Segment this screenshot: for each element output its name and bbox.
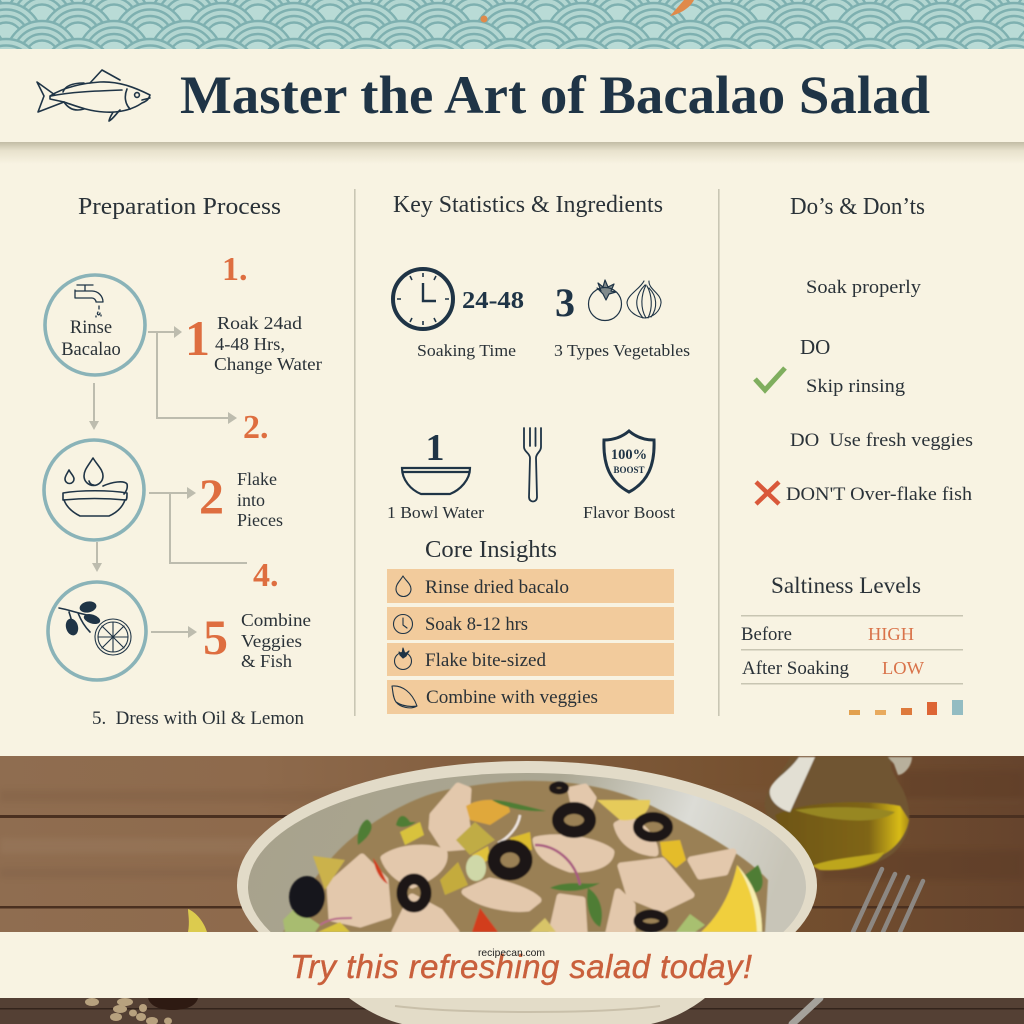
do list: Skip rinsing [806,376,906,397]
step 1 circle: rinse bacalao: Rinse [70,318,112,338]
handwritten call to action: Try this refreshing salad today! [290,948,752,985]
stat: vegetables [554,280,690,360]
flow arrows [89,326,247,638]
do list: DO [800,335,830,359]
step 1 circle: rinse bacalao: Bacalao [61,340,121,360]
saltiness levels table: Before [741,624,792,645]
salad bowl [237,761,817,1024]
icon: fork [524,428,541,502]
stat: soaking time: Soaking Time [417,341,516,360]
step 2 text: into [237,490,265,510]
stat: flavor boost: 100% [611,447,647,463]
final step text: 5. Dress with Oil & Lemon [92,709,304,729]
step 1 markers: 1 [185,310,210,366]
insight row: combine [387,680,674,714]
yellow peppers [313,800,686,932]
step 1 text [214,313,322,374]
icon: onion [627,281,661,318]
do list [755,277,973,451]
saltiness levels table: After Soaking [742,658,849,679]
salad pile [283,781,768,932]
insight row: rinse [387,569,674,603]
oil jug [765,757,912,870]
olive rings [402,784,668,928]
step 2 circle: bowl and drops [44,440,144,540]
heading: do's and don'ts: Do’s & Don’ts [790,194,925,220]
back lemon [597,800,650,820]
icon: shield [604,431,654,492]
panel: do's and don'ts [741,194,973,715]
stat: flavor boost: BOOST [613,465,645,475]
step 2 markers: 2. [243,409,268,446]
saltiness levels table: HIGH [868,624,914,644]
stat: flavor boost [583,431,675,522]
insight row: flake: Flake bite-sized [425,650,546,671]
stat: flavor boost: Flavor Boost [583,503,675,522]
insight row: combine: Combine with veggies [426,687,598,708]
icon: tap [75,285,103,317]
do list: Soak properly [806,277,922,298]
source credit: recipecan.com [478,947,545,959]
step 5 text: & Fish [241,651,292,671]
wooden table [0,756,1024,1024]
stat: bowl of water: 1 [426,427,444,469]
step 2 text: Pieces [237,510,283,530]
insight row: soak [387,607,674,640]
icon: lemon slice [95,619,131,655]
whole olive [289,876,325,918]
lemon wedge [701,865,762,932]
icon: clock [393,269,453,329]
saltiness levels table [741,573,963,715]
step 3 circle: olives and lemon [48,582,146,680]
stat: bowl of water [387,427,484,522]
icon: tomato [588,280,622,320]
call-to-action band [0,932,1024,998]
stat: soaking time: 24-48 [462,287,524,314]
wave pattern banner [0,0,1024,49]
header band [0,49,1024,164]
step 1 text: Change Water [214,354,322,374]
title: Master the Art of Bacalao Salad [180,65,930,125]
stat: vegetables: 3 [555,280,575,325]
saltiness levels table: Saltiness Levels [771,573,921,598]
column dividers [354,189,720,716]
don't item: DON'T Over-flake fish [786,484,973,505]
do list: DO Use fresh veggies [790,430,973,451]
step 2 text: Flake [237,469,277,489]
stat: bowl of water: 1 Bowl Water [387,503,484,522]
step 2 markers [199,409,268,524]
icon: water drops over bowl [63,458,127,516]
step 1 text: 4-48 Hrs, [215,334,285,354]
heading: preparation process: Preparation Process [78,194,281,220]
step 5 text [241,610,311,671]
seeds and dark bowl [85,998,198,1024]
step 4 marker: 4. [253,557,278,594]
insight row: flake [387,643,674,676]
fork [792,869,923,1024]
panel: key statistics and ingredients [387,192,690,714]
step 2 markers: 2 [199,468,224,524]
step 2 text [237,469,283,530]
insight row: rinse: Rinse dried bacalo [425,577,569,598]
greens [283,800,763,932]
step 1 text: Roak 24ad [217,313,302,333]
step 5 text: Veggies [241,631,302,651]
panel: preparation process [44,194,322,729]
saltiness bars [849,700,963,715]
lemon scrap [188,909,207,932]
icon: bowl [402,468,470,494]
icon: fish [37,70,150,121]
step 1 markers [185,251,248,366]
step 5 marker: 5 [203,609,228,665]
heading: core insights: Core Insights [425,537,557,563]
saltiness levels table: LOW [882,658,924,678]
icon: olive branch [59,600,101,637]
step 1 circle: rinse bacalao [45,275,145,375]
insight row: soak: Soak 8-12 hrs [425,614,528,635]
heading: key statistics: Key Statistics & Ingredients [393,192,663,218]
step 1 markers: 1. [222,251,248,288]
stat: vegetables: 3 Types Vegetables [554,341,690,360]
stat: soaking time [393,269,524,360]
icon: red cross [756,482,779,504]
icon: check mark [755,368,785,390]
step 5 text: Combine [241,610,311,630]
food photo [0,756,1024,1024]
